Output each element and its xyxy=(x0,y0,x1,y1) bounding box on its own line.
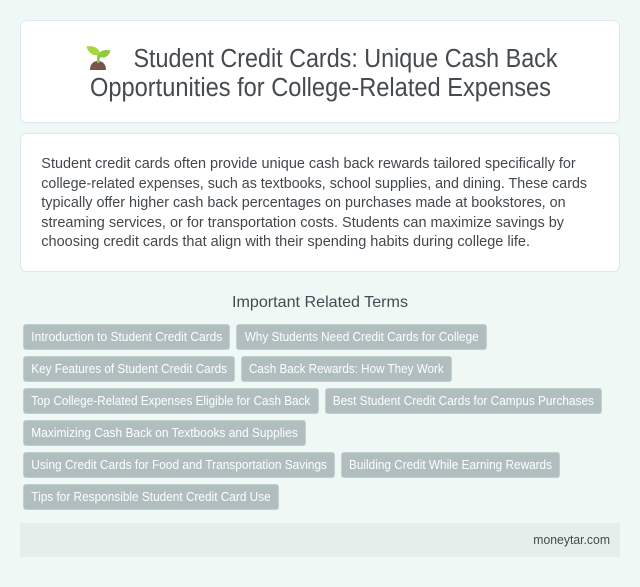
text block: description xyxy=(41,156,587,250)
tag xyxy=(236,324,486,350)
text block: description: streaming services, or for transportation costs. Students can maximize savings by xyxy=(41,215,565,231)
footer: moneytar.com xyxy=(533,533,610,547)
panel: description card xyxy=(20,134,620,272)
title xyxy=(90,45,558,102)
tag: Key Features of Student Credit Cards xyxy=(31,362,227,376)
panel: title card xyxy=(20,20,620,122)
tag xyxy=(24,388,318,414)
tag xyxy=(24,356,234,382)
title: Student Credit Cards: Unique Cash Back xyxy=(134,45,558,73)
tag: Why Students Need Credit Cards for College xyxy=(245,330,479,344)
tag xyxy=(24,324,230,350)
tag: Maximizing Cash Back on Textbooks and Supplies xyxy=(31,426,298,440)
tag: Best Student Credit Cards for Campus Purchases xyxy=(333,394,594,408)
tag: Top College-Related Expenses Eligible for Cash Back xyxy=(31,394,311,408)
tag: Introduction to Student Credit Cards xyxy=(31,330,222,344)
tag: Using Credit Cards for Food and Transportation Savings xyxy=(31,458,327,472)
title: Opportunities for College-Related Expenses xyxy=(90,74,551,102)
text block: description: college-related expenses, such as textbooks, school supplies, and dining. These cards xyxy=(41,176,587,192)
footer xyxy=(20,523,620,557)
tag xyxy=(242,356,452,382)
tag list xyxy=(24,324,602,510)
tag xyxy=(342,452,560,478)
text block: description: Student credit cards often provide unique cash back rewards tailored specifically for xyxy=(41,156,576,172)
heading: related terms: Important Related Terms xyxy=(232,294,408,311)
tag: Tips for Responsible Student Credit Card Use xyxy=(31,490,271,504)
tag xyxy=(24,452,334,478)
text block: description: typically offer higher cash back percentages on purchases made at bookstores, on xyxy=(41,195,566,211)
icon: seedling xyxy=(86,46,110,70)
text block: description: choosing credit cards that align with their spending habits during college life. xyxy=(41,234,530,250)
tag xyxy=(24,420,306,446)
tag xyxy=(326,388,602,414)
tag: Cash Back Rewards: How They Work xyxy=(249,362,444,376)
tag xyxy=(24,484,278,510)
tag: Building Credit While Earning Rewards xyxy=(349,458,552,472)
